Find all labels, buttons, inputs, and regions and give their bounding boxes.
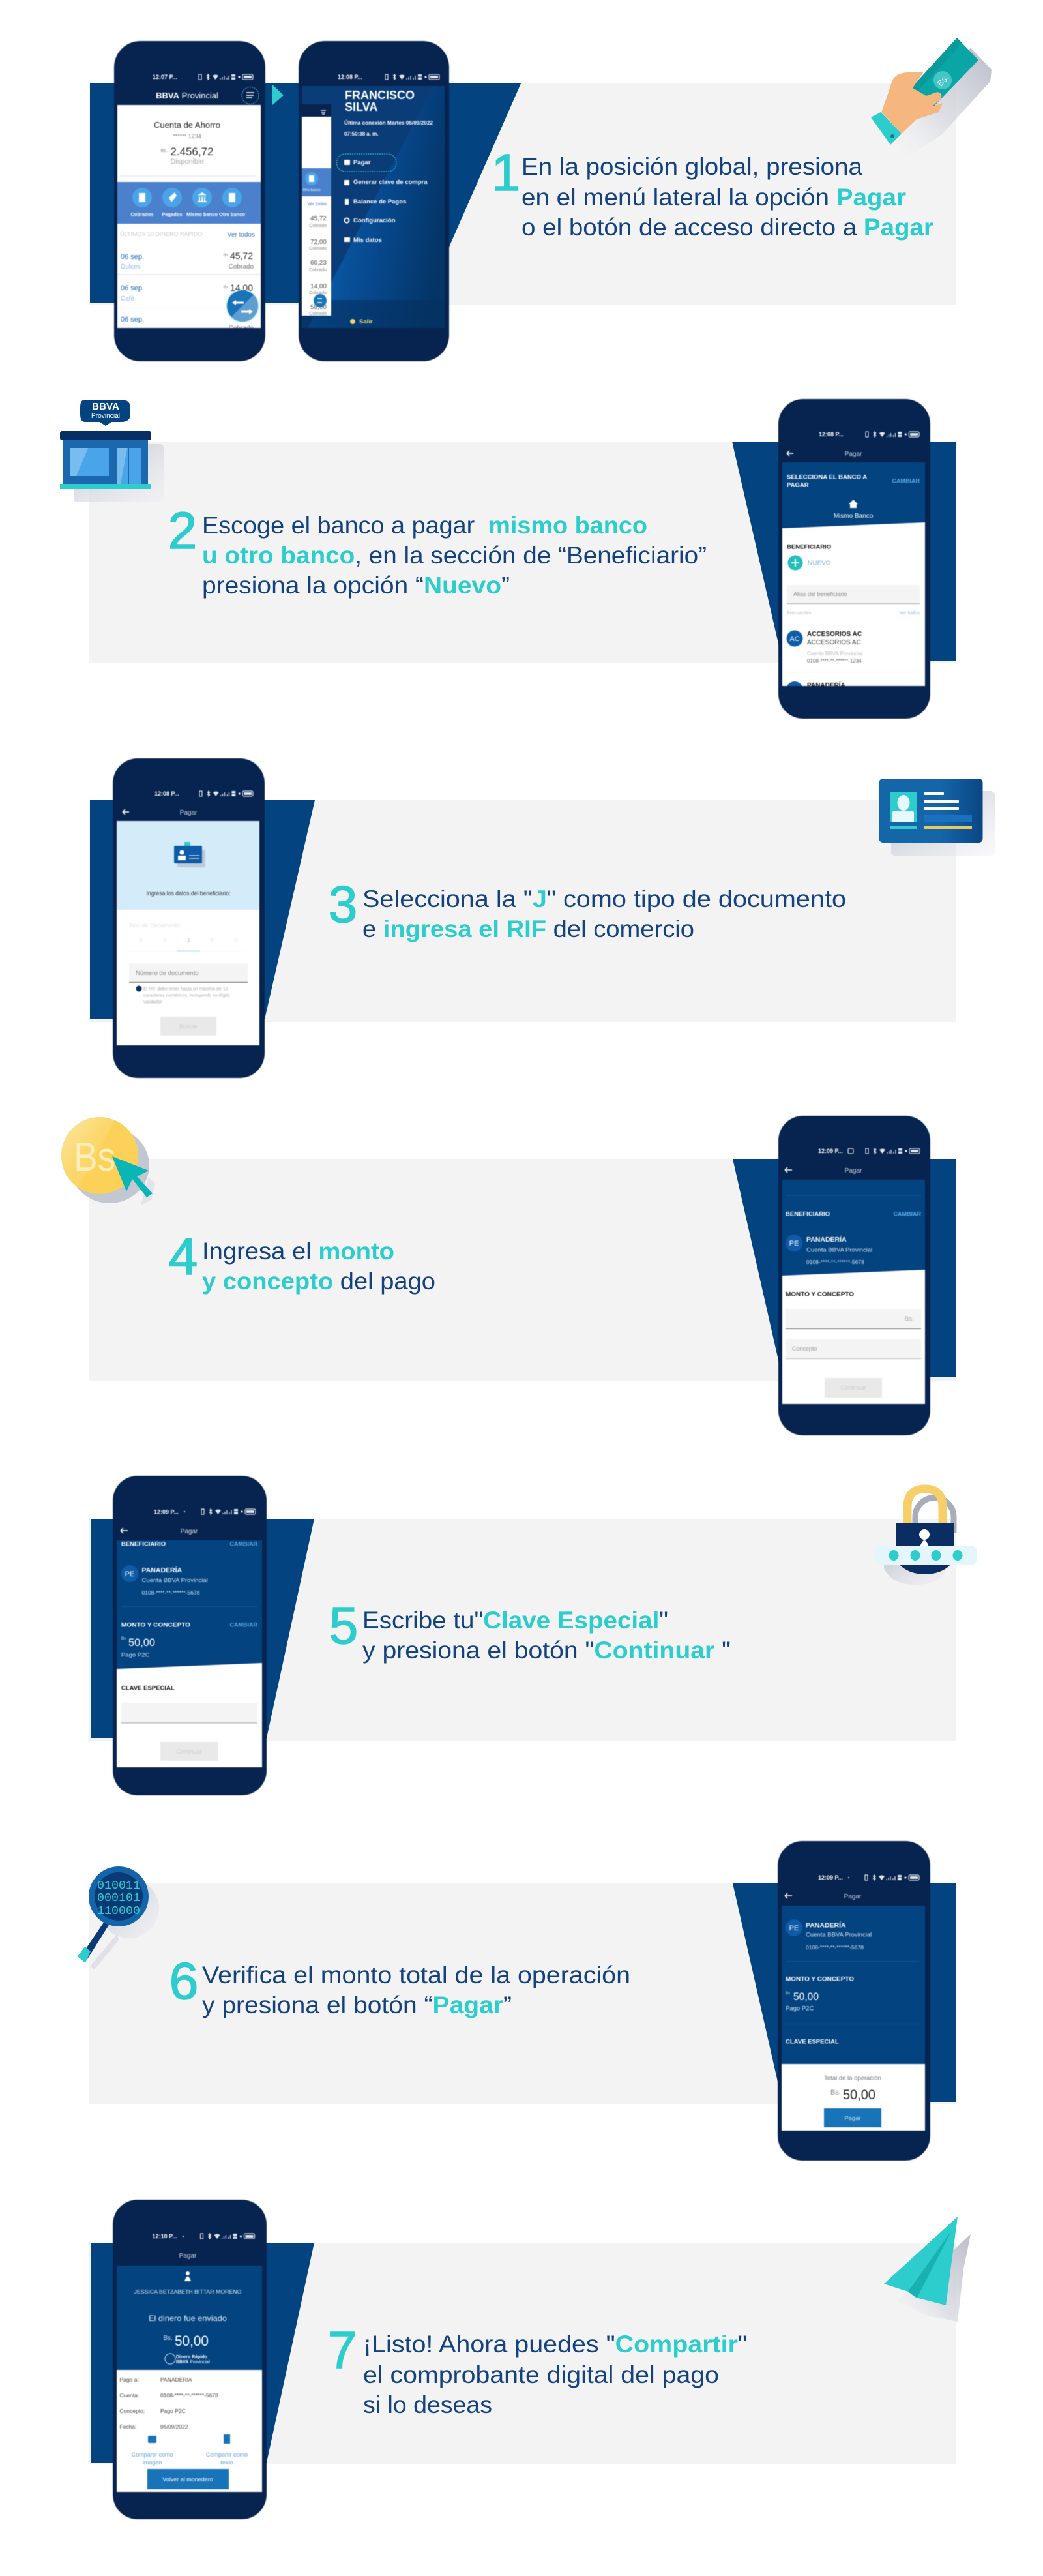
step 4 instruction text: Ingresa el monto <box>202 1238 394 1265</box>
phone: amount and concept: 0108-****-**-******-5678 <box>806 1259 864 1265</box>
app sliver behind menu: Cobrado <box>309 224 327 228</box>
icon: magnifying glass over binary: 010011 <box>97 1880 140 1893</box>
step number 4: 4 <box>169 1227 198 1285</box>
phone: global position: 45,72 <box>230 250 253 261</box>
icon: bank branch <box>60 400 164 502</box>
phone: document type: E <box>163 938 167 944</box>
phone: document type: J <box>187 938 190 944</box>
phone: amount and concept: PE <box>789 1240 799 1248</box>
phone: special key: CLAVE ESPECIAL <box>121 1685 175 1692</box>
phone: payment receipt: Concepto: <box>120 2408 145 2414</box>
phone: side menu: Configuración <box>353 217 396 224</box>
phone: global position <box>114 41 265 361</box>
panel: step 3 grey background <box>89 800 956 1022</box>
phone: global position: Café <box>121 295 135 303</box>
phone: global position: Disponible <box>170 158 204 166</box>
step 5 instruction text: Escribe tu"Clave Especial " <box>362 1607 668 1634</box>
phone: payment receipt: Volver al monedero <box>162 2476 213 2483</box>
phone: document type: Ingresa los datos del beneficiario: <box>146 890 231 897</box>
panel: step 1 grey background <box>89 83 956 305</box>
phone: side menu: 07:50:38 a. m. <box>344 131 378 137</box>
step 2 instruction text: Escoge el banco a pagar mismo banco <box>202 512 647 539</box>
phone: choose bank <box>778 399 930 719</box>
phone: amount and concept <box>778 1116 930 1435</box>
phone: global position: Ver todos <box>228 232 255 239</box>
step 5 instruction text: y presiona el botón " Continuar " <box>362 1637 731 1664</box>
phone: global position: 06 sep. <box>121 253 144 261</box>
step 1 instruction text: o el botón de acceso directo a Pagar <box>522 214 933 241</box>
phone: special key: Pago P2C <box>121 1651 149 1659</box>
app sliver behind menu: 45,72 <box>310 215 327 222</box>
phone: global position: Cobrados <box>130 211 154 217</box>
phone: special key: BENEFICIARIO <box>121 1540 166 1548</box>
panel: step 3 blue band <box>90 800 315 1019</box>
step 1 instruction text: en el menú lateral la opción Pagar <box>522 184 906 211</box>
phone: choose bank: BENEFICIARIO <box>787 544 831 550</box>
app sliver behind menu: 60,23 <box>310 260 327 267</box>
icon: bank branch: BBVA <box>92 401 119 412</box>
phone: special key <box>113 1476 267 1795</box>
phone: choose bank: AC <box>789 635 800 643</box>
app sliver behind menu: 14,00 <box>310 283 327 290</box>
phone: verify amount: PANADERÍA <box>806 1921 846 1929</box>
icon: hand holding banknote: Bs. <box>935 72 950 88</box>
phone: amount and concept: PANADERÍA <box>806 1235 847 1244</box>
phone: special key: Bs <box>121 1637 126 1641</box>
step 7 <box>89 2200 971 2519</box>
phone: payment receipt: 06/09/2022 <box>160 2423 188 2430</box>
step 4 <box>61 1116 956 1435</box>
arrow between phones <box>272 84 284 106</box>
panel: step 1 blue band <box>90 83 521 303</box>
phone: payment receipt: BBVA Provincial <box>176 2360 210 2365</box>
phone: choose bank: Frecuentes <box>787 610 812 616</box>
phone: global position: Dulces <box>121 263 141 271</box>
phone: document type: 12:08 P... <box>154 790 179 797</box>
step 4 instruction text: y concepto del pago <box>202 1268 435 1295</box>
phone: verify amount: 50,00 <box>793 1990 819 2003</box>
phone: document type: Número de documento <box>136 970 199 977</box>
phone: global position: Mismo banco <box>186 211 218 217</box>
phone: global position: Cobrado <box>229 325 254 332</box>
floating action button <box>226 290 259 322</box>
icon: small ID card <box>174 842 205 867</box>
icon: coin with cursor: Bs <box>74 1135 115 1180</box>
step 1 instruction text: En la posición global, presiona <box>522 153 862 180</box>
phone: special key: PANADERÍA <box>142 1566 183 1574</box>
phone: payment receipt: Compartir como <box>132 2451 173 2458</box>
phone: amount and concept: Pagar <box>845 1167 862 1175</box>
phone: verify amount: Pago P2C <box>786 2005 814 2013</box>
icon: paper plane <box>884 2217 971 2322</box>
step number 2: 2 <box>168 502 197 560</box>
step 2 instruction text <box>202 512 707 599</box>
phone: amount and concept: 12:09 P... <box>818 1148 843 1154</box>
icon: bank branch: Provincial <box>91 412 120 420</box>
phone: choose bank: ACCESORIOS AC <box>807 639 861 646</box>
phone: global position: Cuenta de Ahorro <box>154 120 220 130</box>
phone: payment receipt: Fecha: <box>120 2423 137 2430</box>
phone: payment receipt: texto <box>220 2459 233 2466</box>
icon: padlock with password <box>875 1489 977 1585</box>
phone: verify amount: PE <box>789 1925 799 1932</box>
phone: document type: Buscar <box>179 1023 198 1030</box>
icon: magnifying glass over binary: 110000 <box>97 1905 140 1918</box>
icon: ID card <box>879 779 995 856</box>
app sliver behind menu: Otro banco <box>302 188 321 192</box>
phone: payment receipt: Pagar <box>179 2253 197 2260</box>
step 7 instruction text: ¡Listo! Ahora puedes " Compartir " <box>363 2331 747 2358</box>
step 3 instruction text: e ingresa el RIF del comercio <box>362 916 694 942</box>
phone: global position: 06 sep. <box>121 284 144 292</box>
phone: choose bank: Pagar <box>845 451 862 458</box>
icon: hand holding banknote <box>871 38 992 157</box>
phone: payment receipt: Compartir como <box>206 2451 248 2458</box>
panel: step 7 grey background <box>89 2243 956 2464</box>
phone: payment receipt: 50,00 <box>175 2333 209 2349</box>
panel: step 5 blue band <box>91 1519 314 1738</box>
phone: payment receipt: El dinero fue enviado <box>149 2314 227 2323</box>
phone: side menu: Mis datos <box>353 237 382 244</box>
phone: amount and concept: CAMBIAR <box>893 1210 921 1217</box>
phone: global position: 2.456,72 <box>168 145 214 158</box>
icon: magnifying glass over binary: 000101 <box>97 1892 140 1905</box>
panel: step 2 grey background <box>89 442 956 663</box>
step 7 instruction text <box>363 2331 747 2418</box>
phone: verify amount: Pagar <box>844 1893 862 1900</box>
phone: special key: 50,00 <box>128 1636 155 1649</box>
phone: amount and concept: Continuar <box>840 1385 866 1391</box>
phone: side menu: Generar clave de compra <box>353 179 428 186</box>
app sliver behind menu: Ver todos <box>307 202 327 207</box>
phone: verify amount: 12:09 P... <box>818 1874 843 1881</box>
phone: payment receipt <box>113 2200 267 2519</box>
phone: special key: MONTO Y CONCEPTO <box>121 1621 190 1629</box>
phone: side menu: Última conexión Martes 06/09/2022 <box>344 120 433 126</box>
phone: special key: CAMBIAR <box>229 1621 257 1628</box>
phone: special key: CAMBIAR <box>229 1540 257 1547</box>
phone: global position: BBVA Provincial <box>156 91 218 100</box>
phone: payment receipt: imagen <box>143 2459 162 2466</box>
phone: special key: 12:09 P... <box>154 1509 179 1516</box>
step 7 instruction text: el comprobante digital del pago <box>363 2361 719 2388</box>
panel: step 7 blue band <box>91 2243 314 2463</box>
phone: amount and concept: Concepto <box>792 1345 817 1352</box>
step 5 instruction text <box>362 1607 731 1664</box>
phone: amount and concept: Cuenta BBVA Provincial <box>806 1247 872 1253</box>
phone: amount and concept: BENEFICIARIO <box>786 1210 830 1218</box>
phone: verify amount: 50,00 <box>843 2088 875 2103</box>
phone: verify amount <box>778 1841 930 2161</box>
phone: global position: ****** 1234 <box>173 133 201 140</box>
phone: special key: PE <box>125 1570 134 1578</box>
phone: payment receipt: PANADERIA <box>160 2376 192 2383</box>
step 6 instruction text: y presiona el botón “ Pagar” <box>202 1992 512 2018</box>
phone: document type: P <box>210 938 214 944</box>
panel: step 4 grey background <box>89 1159 956 1381</box>
phone: choose bank: ACCESORIOS AC <box>807 631 862 638</box>
phone: global position: 12:07 P... <box>153 74 177 80</box>
step number 5: 5 <box>329 1596 358 1655</box>
phone: global position: Pagados <box>162 211 183 217</box>
phone: verify amount: Cuenta BBVA Provincial <box>806 1932 872 1938</box>
phone: side menu <box>299 41 449 361</box>
step 3 <box>89 758 995 1078</box>
phone: document type: V <box>139 938 143 944</box>
phone: verify amount: Bs. <box>830 2089 841 2097</box>
phone: global position: Bs. <box>224 286 230 290</box>
phone: choose bank: PANADERÍA <box>807 681 845 689</box>
phone: special key: Pagar <box>181 1528 198 1535</box>
step 6 <box>78 1841 956 2161</box>
step 5 <box>89 1476 977 1795</box>
phone: choose bank: NUEVO <box>808 560 831 567</box>
phone: choose bank: Alias del beneficiario <box>793 591 847 597</box>
step 6 instruction text: Verifica el monto total de la operación <box>202 1962 630 1988</box>
phone: side menu: Pagar <box>353 159 371 166</box>
panel: step 4 blue band <box>733 1159 956 1377</box>
phone: document type: Pagar <box>180 809 198 816</box>
step number 3: 3 <box>329 875 357 933</box>
panel: step 2 blue band <box>732 442 956 661</box>
step number 1: 1 <box>492 143 520 202</box>
phone: side menu: 12:08 P... <box>338 74 362 80</box>
phone: payment receipt: Pago P2C <box>160 2408 186 2414</box>
step 3 instruction text <box>362 886 846 942</box>
phone: global position: 06 sep. <box>121 316 144 323</box>
app sliver behind menu: 58,00 <box>310 304 327 311</box>
phone: global position: Bs. <box>224 254 230 258</box>
phone: document type: caracteres numéricos, incluyendo su dígito <box>143 994 230 998</box>
step 1 <box>89 38 992 361</box>
phone: choose bank: Ver todos <box>899 610 920 616</box>
app sliver behind menu <box>302 104 331 316</box>
phone: special key: Continuar <box>176 1748 202 1755</box>
phone: choose bank: Cuenta BBVA Provincial <box>807 651 862 657</box>
phone: payment receipt: 0108-****-**-******-5678 <box>160 2392 218 2399</box>
phone: global position: Otro banco <box>219 211 245 217</box>
step number 7: 7 <box>328 2321 357 2379</box>
phone: verify amount: Total de la operación <box>824 2075 881 2082</box>
app sliver behind menu: Cobrado <box>309 291 327 295</box>
phone: amount and concept: MONTO Y CONCEPTO <box>786 1291 854 1298</box>
step 2 <box>60 399 956 719</box>
step 7 instruction text: si lo deseas <box>363 2391 492 2418</box>
phone: side menu: FRANCISCO <box>345 89 415 102</box>
panel: step 5 grey background <box>89 1519 956 1741</box>
phone: payment receipt: JESSICA BETZABETH BITTAR MORENO <box>134 2288 242 2295</box>
phone: document type: G <box>234 938 238 944</box>
panel: step 6 grey background <box>89 1883 956 2104</box>
phone: verify amount: CLAVE ESPECIAL <box>786 2039 839 2045</box>
phone: payment receipt: Bs. <box>163 2335 173 2342</box>
phone: choose bank: Mismo Banco <box>834 513 874 520</box>
phone: special key: 0108-****-**-******-5678 <box>142 1589 200 1596</box>
phone: choose bank: SELECCIONA EL BANCO A <box>787 473 867 481</box>
icon: coin with cursor <box>61 1117 155 1205</box>
step 3 instruction text: Selecciona la " J" como tipo de documento <box>362 886 846 912</box>
phone: global position: ÚLTIMOS 10 DINERO RÁPIDO <box>120 231 202 237</box>
phone: global position: Cobrado <box>229 263 254 271</box>
phone: document type: El RIF debe tener hasta un máximo de 10 <box>143 987 228 991</box>
app sliver behind menu: Cobrado <box>309 312 327 316</box>
phone: verify amount: 0108-****-**-******-5678 <box>806 1944 864 1951</box>
phone: verify amount: Bs <box>786 1992 790 1996</box>
phone: choose bank: 12:08 P... <box>819 431 844 438</box>
phone: choose bank: CAMBIAR <box>892 477 920 484</box>
phone: payment receipt: Pago a: <box>120 2376 139 2383</box>
app sliver behind menu: Cobrado <box>309 247 327 251</box>
step number 6: 6 <box>169 1952 198 2010</box>
phone: payment receipt: 12:10 P... <box>153 2233 177 2239</box>
step 6 instruction text <box>202 1962 630 2018</box>
step 1 instruction text <box>522 153 933 241</box>
phone: payment receipt: Dinero Rápido <box>176 2355 207 2359</box>
app sliver behind menu: 72,00 <box>310 239 327 246</box>
step 2 instruction text: u otro banco , en la sección de “Beneficiario” <box>202 542 707 569</box>
phone: side menu: SILVA <box>345 100 377 113</box>
step 2 instruction text: presiona la opción “ Nuevo” <box>202 572 510 599</box>
phone: document type <box>113 758 265 1078</box>
step 4 instruction text <box>202 1238 435 1295</box>
icon: magnifying glass over binary <box>78 1866 159 1969</box>
phone: document type: Tipo de Documento <box>129 922 180 929</box>
phone: amount and concept: Bs. <box>905 1316 914 1323</box>
phone: side menu: Balance de Pagos <box>353 198 406 205</box>
phone: verify amount: Pagar <box>844 2115 861 2122</box>
phone: choose bank: 0108-****-**-******-1234 <box>807 658 862 664</box>
phone: choose bank: PAGAR <box>787 481 809 489</box>
phone: side menu: Salir <box>359 318 373 325</box>
phone: document type: validador <box>143 1000 162 1004</box>
phone: payment receipt: Cuenta: <box>120 2392 139 2399</box>
phone: verify amount: MONTO Y CONCEPTO <box>786 1976 854 1983</box>
phone: global position: Bs. <box>160 149 168 153</box>
app sliver behind menu: Cobrado <box>309 268 327 273</box>
phone: global position: 14,00 <box>230 282 253 293</box>
panel: step 6 blue band <box>733 1883 956 2102</box>
phone: special key: Cuenta BBVA Provincial <box>142 1577 208 1584</box>
